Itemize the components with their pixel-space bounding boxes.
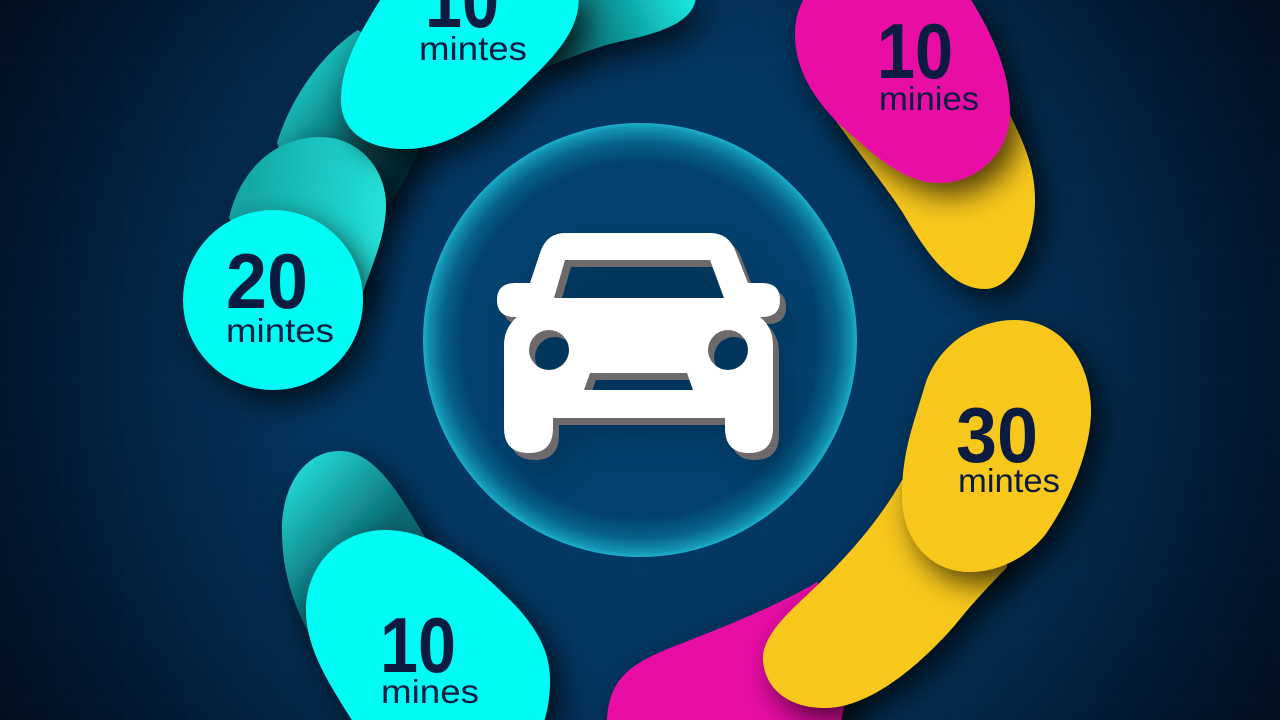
label: 30 mintes: mintes (958, 462, 1060, 499)
label: 10 mintes top left: mintes (419, 30, 527, 67)
label: 30 mintes (956, 391, 1060, 499)
segment: magenta and yellow top right (795, 0, 1035, 289)
label: 20 mintes: 20 (226, 237, 308, 325)
label: 20 mintes (226, 237, 334, 349)
segment: cyan left 20 mintes (183, 30, 420, 390)
label: 20 mintes: mintes (226, 312, 334, 349)
label: 10 mintes top left (419, 0, 527, 67)
segment: cyan top left (341, 0, 696, 149)
label: 30 mintes: 30 (956, 391, 1038, 479)
centre disc (423, 123, 857, 557)
car icon (497, 233, 796, 475)
label: 10 minies top right: minies (879, 80, 979, 117)
segment: magenta and yellow bottom right (607, 320, 1091, 720)
label: 10 minies top right (877, 7, 979, 117)
label: 10 mines: 10 (380, 601, 456, 689)
segment: cyan bottom left (282, 451, 550, 720)
label: 10 minies top right: 10 (877, 7, 953, 95)
label: 10 mines: mines (381, 673, 479, 710)
